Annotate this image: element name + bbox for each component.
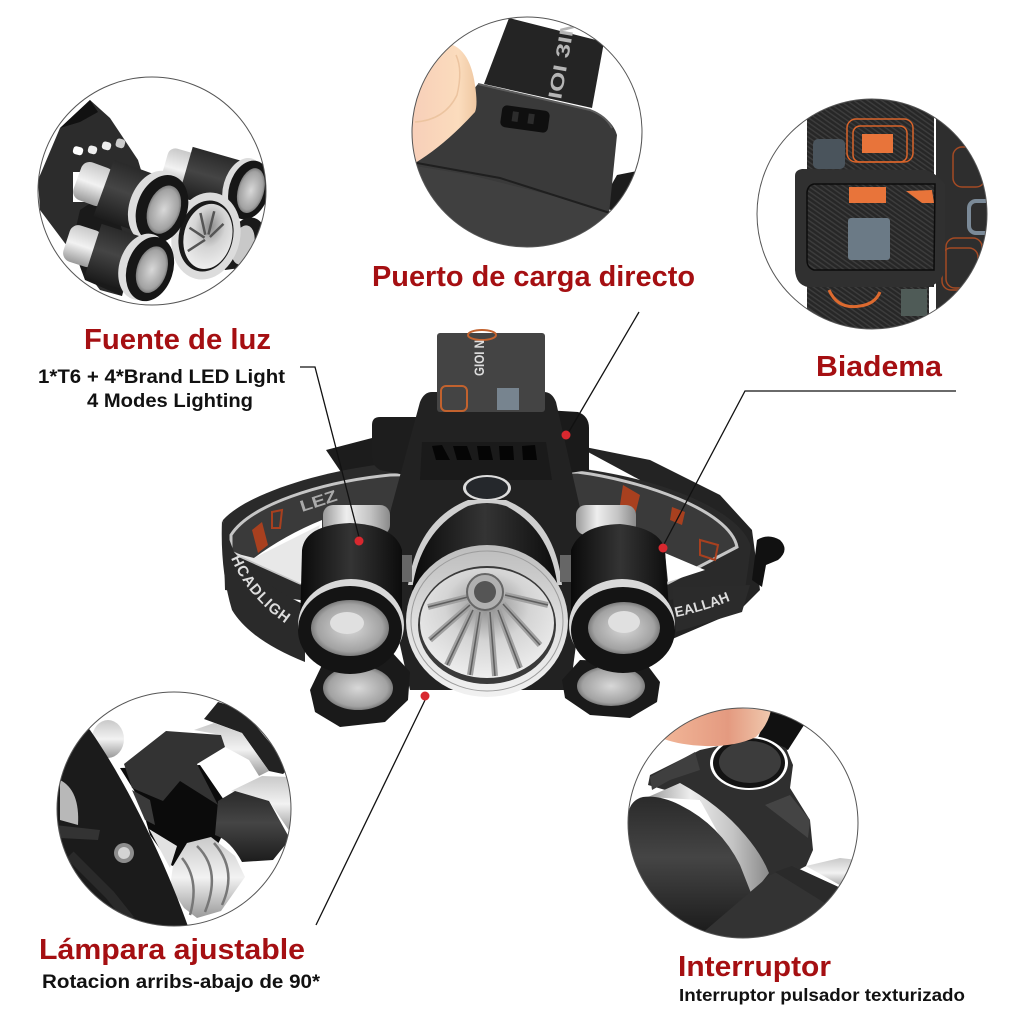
headband back: LEZ <box>298 488 340 516</box>
leader line: charging port <box>562 312 639 440</box>
power button <box>463 475 511 501</box>
orange print <box>252 485 685 553</box>
inset: headband buckle close-up <box>795 100 986 328</box>
arm <box>58 729 188 926</box>
front strap right: EALLAH <box>674 592 730 617</box>
lower barrel <box>170 776 297 918</box>
heading: headband: Biadema <box>816 351 943 383</box>
lower right lamp <box>562 660 660 718</box>
heading: switch: Interruptor <box>678 951 831 983</box>
body recess <box>420 442 552 480</box>
inset outline: light source <box>38 77 266 305</box>
switch housing <box>648 737 813 890</box>
main barrel <box>400 500 572 590</box>
reflector facets <box>428 595 548 676</box>
text: switch description: Interruptor pulsador texturizado <box>679 985 965 1005</box>
text: rotation description: Rotacion arribs-abajo de 90* <box>42 972 321 993</box>
hinge block <box>124 731 225 805</box>
inset: adjustable lamp close-up <box>58 702 290 926</box>
right lamp <box>569 505 675 673</box>
strap <box>484 14 604 108</box>
text: light source description: 4 Modes Lighting <box>87 391 253 412</box>
charger body <box>416 83 617 246</box>
main lens <box>171 192 241 280</box>
vents <box>432 445 537 460</box>
headband back <box>223 438 760 640</box>
dark recess <box>120 765 223 866</box>
barrel: upper left <box>73 162 188 241</box>
lower left lamp <box>310 650 410 727</box>
back strap <box>807 100 986 328</box>
inset outline: headband <box>757 99 987 329</box>
strap: IOI 3IM <box>545 14 581 101</box>
headlamp product <box>222 329 784 727</box>
side housings <box>372 417 425 478</box>
front strap left <box>222 520 305 662</box>
barrel: lower left <box>63 224 174 302</box>
text: light source description <box>38 367 286 412</box>
leader line: light source <box>300 367 364 546</box>
lens glimpse <box>132 790 155 825</box>
left lamp <box>298 505 404 674</box>
inset outline: adjustable lamp <box>57 692 291 926</box>
inset: switch close-up <box>628 708 852 938</box>
leader line: headband <box>658 391 956 552</box>
strap through buckle <box>807 184 935 270</box>
inset outline: switch <box>628 708 858 938</box>
switch button <box>710 736 788 790</box>
lower barrel <box>705 869 838 938</box>
front strap left: HCADLIGH <box>231 554 291 623</box>
heading: charging port: Puerto de carga directo <box>372 261 695 293</box>
barrel: upper right <box>163 146 266 220</box>
buckle knob <box>752 536 785 587</box>
white gap <box>149 829 177 868</box>
top silver ring <box>194 723 269 776</box>
heading: adjustable lamp: Lámpara ajustable <box>39 934 305 966</box>
inset: direct charging port close-up <box>412 18 634 246</box>
finger <box>412 45 476 162</box>
text: light source description: 1*T6 + 4*Brand LED Light <box>38 367 286 388</box>
small rear lamp <box>232 218 261 269</box>
finger <box>664 708 771 746</box>
inset: light source close-up <box>38 100 266 302</box>
leader line: adjustable lamp <box>316 692 430 925</box>
top strap: GIOI N <box>471 340 487 376</box>
buckle <box>795 169 945 287</box>
main bezel <box>406 545 568 697</box>
black strap <box>758 712 804 750</box>
top strap <box>437 330 545 412</box>
main body <box>388 392 585 690</box>
silver band <box>648 783 769 895</box>
charging port <box>500 105 550 133</box>
barrel <box>628 797 751 932</box>
top right barrel <box>204 702 290 774</box>
inset outline: charging port <box>412 17 642 247</box>
silver bump <box>92 720 124 758</box>
heading: light source: Fuente de luz <box>84 324 271 356</box>
knob <box>610 172 634 210</box>
